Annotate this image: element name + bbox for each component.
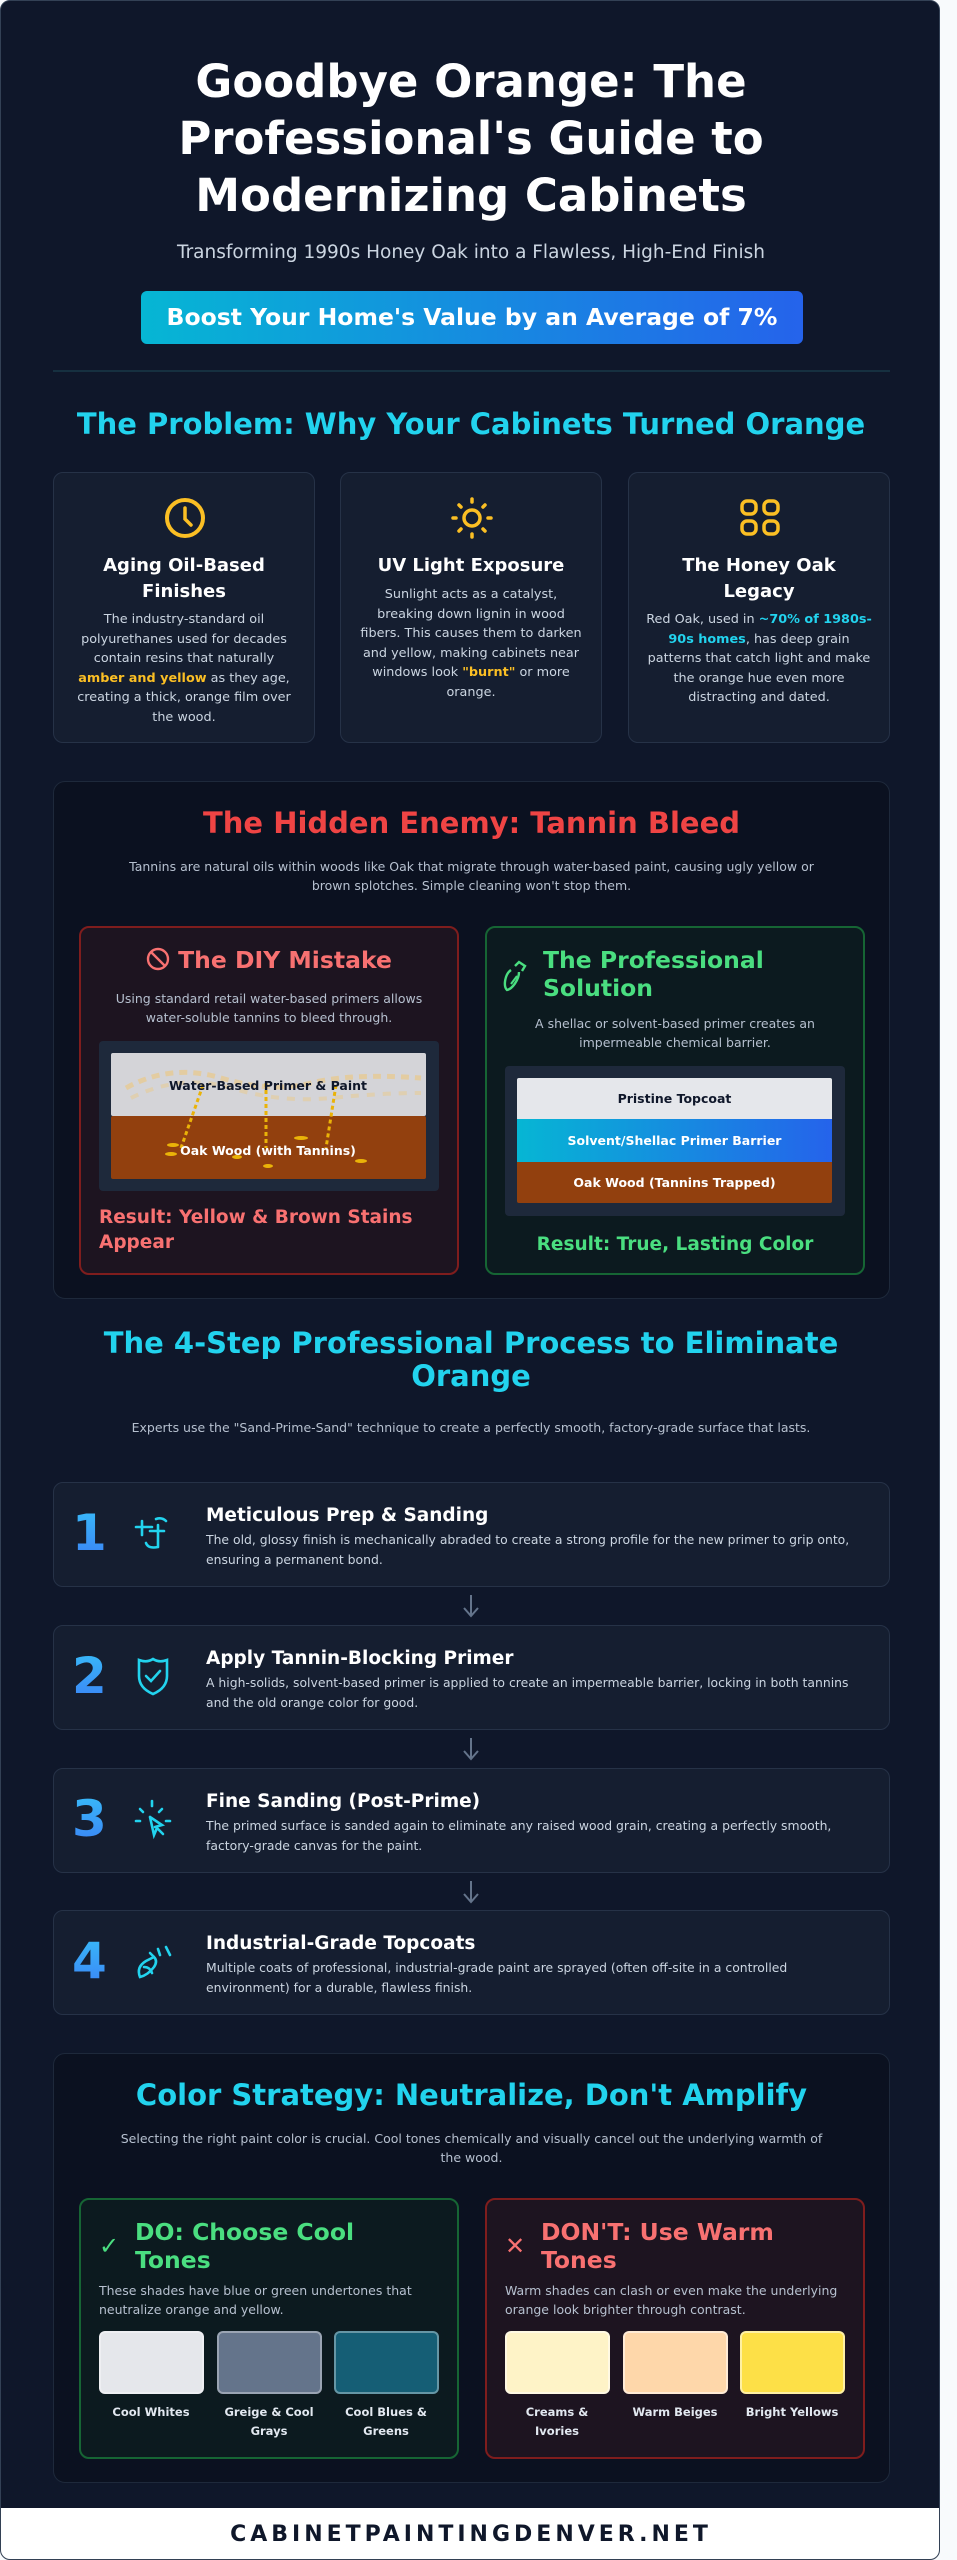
diagram: barrier: Solvent/Shellac Primer Barrier xyxy=(568,1133,781,1148)
text: Warm shades can clash or even make the underlying orange look brighter through contrast. xyxy=(505,2283,837,2317)
intro text: Tannins are natural oils within woods like Oak that migrate through water-based paint, causing ugly yellow or brown splotches. Simple cleaning won't stop them. xyxy=(129,859,814,893)
title: Goodbye Orange: The xyxy=(195,55,747,108)
value banner xyxy=(141,291,803,344)
icon: sun xyxy=(451,497,493,539)
arrow xyxy=(463,1738,479,1760)
step 2: Apply Tannin-Blocking Primer xyxy=(206,1648,513,1669)
heading: don't: DON'T: Use Warm xyxy=(541,2218,774,2246)
title: Professional's Guide to xyxy=(178,112,764,165)
heading: do: DO: Choose Cool xyxy=(135,2218,354,2246)
step 1 xyxy=(53,1482,890,1587)
step 3: Fine Sanding (Post-Prime) xyxy=(206,1791,480,1812)
card title xyxy=(103,555,265,602)
step 2: 2 xyxy=(72,1647,107,1705)
step 4 xyxy=(53,1910,890,2015)
diagram: bleed: Oak Wood (with Tannins) xyxy=(180,1143,356,1158)
step 3 xyxy=(53,1768,890,1873)
step 4: Multiple coats of professional, industrial-grade paint are sprayed (often off-site in a controlled environment) for a durable, flawless finish. xyxy=(206,1960,787,1995)
heading: tannin bleed: The Hidden Enemy: Tannin Bleed xyxy=(203,806,740,840)
swatches: cool: Cool Whites xyxy=(112,2405,190,2419)
diagram: barrier: Oak Wood (Tannins Trapped) xyxy=(573,1175,776,1190)
heading: don't: Tones xyxy=(541,2246,617,2274)
diagram: barrier xyxy=(505,1066,845,1216)
icon: shield xyxy=(138,1658,168,1696)
card title: Aging Oil-Based xyxy=(103,555,265,576)
swatches: warm: Bright Yellows xyxy=(746,2405,838,2419)
swatches: cool xyxy=(99,2331,439,2438)
arrow xyxy=(463,1881,479,1904)
heading: pro: Solution xyxy=(543,974,653,1002)
heading: don't: ✕ xyxy=(505,2232,525,2260)
icon: brush xyxy=(504,960,527,992)
heading: color strategy: Color Strategy: Neutralize, Don't Amplify xyxy=(136,2078,807,2112)
card title xyxy=(682,555,836,602)
result: Result: Yellow & Brown Stains xyxy=(99,1207,413,1228)
swatches: cool: Cool Blues & Greens xyxy=(345,2405,427,2438)
heading: don't xyxy=(505,2218,774,2274)
panel: color strategy xyxy=(53,2053,890,2483)
diagram: bleed: Water-Based Primer & Paint xyxy=(169,1078,367,1093)
panel: don't xyxy=(485,2198,865,2459)
step 4: Industrial-Grade Topcoats xyxy=(206,1933,475,1954)
card title: Legacy xyxy=(723,581,795,602)
text: A shellac or solvent-based primer creates an impermeable chemical barrier. xyxy=(535,1016,815,1050)
title: Modernizing Cabinets xyxy=(195,169,747,222)
subtitle: Transforming 1990s Honey Oak into a Flawless, High-End Finish xyxy=(177,242,765,263)
panel: pro solution xyxy=(485,926,865,1275)
heading: DIY: The DIY Mistake xyxy=(178,946,392,974)
icon: sanding hand xyxy=(134,1517,168,1549)
heading: do: ✓ xyxy=(99,2232,119,2260)
result: Appear xyxy=(99,1232,174,1253)
heading: problem: The Problem: Why Your Cabinets Turned Orange xyxy=(77,407,865,441)
result xyxy=(99,1207,413,1253)
diagram: barrier: Pristine Topcoat xyxy=(618,1091,731,1106)
heading: do xyxy=(99,2218,354,2274)
step 3: 3 xyxy=(72,1790,107,1848)
result: Result: True, Lasting Color xyxy=(537,1234,813,1255)
intro text: Selecting the right paint color is crucial. Cool tones chemically and visually cancel out the underlying warmth of the wood. xyxy=(121,2131,822,2165)
step 1: 1 xyxy=(72,1504,107,1562)
text: Using standard retail water-based primers allows water-soluble tannins to bleed through. xyxy=(116,991,422,1025)
process intro: Experts use the "Sand-Prime-Sand" technique to create a perfectly smooth, factory-grade surface that lasts. xyxy=(132,1420,810,1435)
heading: do: Tones xyxy=(135,2246,211,2274)
swatches: cool: Greige & Cool Grays xyxy=(224,2405,314,2438)
heading: pro: The Professional xyxy=(543,946,764,974)
icon: grid xyxy=(740,499,780,536)
value banner: Boost Your Home's Value by an Average of 7% xyxy=(167,303,777,331)
arrow xyxy=(463,1595,479,1618)
step 2: A high-solids, solvent-based primer is applied to create an impermeable barrier, locking in both tannins and the old orange color for good. xyxy=(206,1675,848,1710)
icon: clock xyxy=(165,498,205,538)
icon: click sparkle xyxy=(134,1800,172,1840)
panel: tannin bleed xyxy=(53,781,890,1299)
card title: Finishes xyxy=(142,581,226,602)
swatches: warm: Creams & Ivories xyxy=(526,2405,588,2438)
panel: uv light xyxy=(340,472,602,743)
panel: honey oak xyxy=(628,472,890,743)
swatches: warm xyxy=(505,2331,845,2438)
step 4: 4 xyxy=(72,1932,107,1990)
diagram: bleed xyxy=(99,1041,439,1191)
footer xyxy=(1,2508,941,2560)
card text: Sunlight acts as a catalyst, breaking down lignin in wood fibers. This causes them to darken and yellow, making cabinets near windows look "burnt" or more orange. xyxy=(360,587,582,700)
step 1: Meticulous Prep & Sanding xyxy=(206,1505,488,1526)
card title: UV Light Exposure xyxy=(378,555,564,576)
icon: spray xyxy=(138,1946,172,1978)
step 3: The primed surface is sanded again to eliminate any raised wood grain, creating a perfectly smooth, factory-grade canvas for the paint. xyxy=(206,1818,831,1853)
panel: DIY mistake xyxy=(79,926,459,1275)
text: These shades have blue or green undertones that neutralize orange and yellow. xyxy=(99,2283,412,2317)
step 1: The old, glossy finish is mechanically abraded to create a strong profile for the new primer to grip onto, ensuring a permanent bond. xyxy=(206,1532,849,1567)
heading: pro xyxy=(504,946,764,1002)
swatches: warm: Warm Beiges xyxy=(632,2405,718,2419)
card text: Red Oak, used in ~70% of 1980s-90s homes, has deep grain patterns that catch light and make the orange hue even more distracting and dated. xyxy=(646,612,872,705)
card text: The industry-standard oil polyurethanes used for decades contain resins that naturally amber and yellow as they age, creating a thick, orange film over the wood. xyxy=(77,612,291,724)
footer: CABINETPAINTINGDENVER.NET xyxy=(230,2522,712,2547)
panel: aging finishes xyxy=(53,472,315,743)
heading: 4-step process: The 4-Step Professional Process to Eliminate Orange xyxy=(104,1326,838,1393)
step 2 xyxy=(53,1625,890,1730)
title xyxy=(178,55,764,222)
card title: The Honey Oak xyxy=(682,555,836,576)
panel: do xyxy=(79,2198,459,2459)
